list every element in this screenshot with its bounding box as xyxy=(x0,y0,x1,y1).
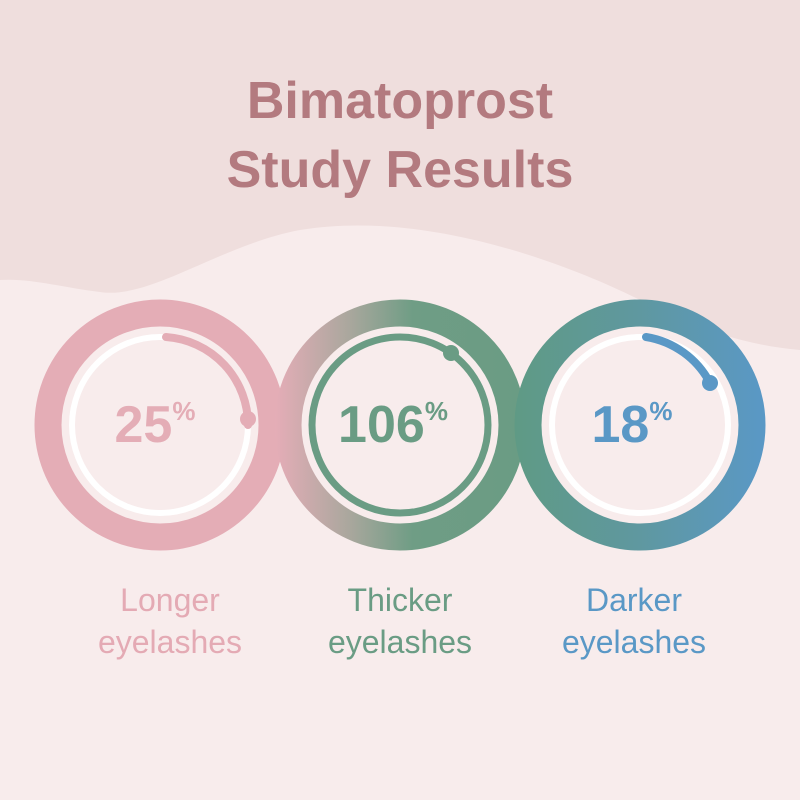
ring: right blue: % xyxy=(649,396,672,426)
label: darker xyxy=(562,582,706,660)
label: longer: Longer xyxy=(120,582,220,618)
ring: right blue: 18 xyxy=(592,396,649,454)
ring: middle green: % xyxy=(425,396,448,426)
label: thicker: Thicker xyxy=(348,582,453,618)
label: longer xyxy=(98,582,242,660)
background top wave xyxy=(0,0,800,350)
ring: middle green: 106 xyxy=(338,396,425,454)
ring: right blue xyxy=(528,313,752,537)
title: Bimatoprost xyxy=(247,72,553,130)
ring: left pink: 25 xyxy=(115,396,172,454)
title xyxy=(227,72,573,199)
label: thicker: eyelashes xyxy=(328,624,472,660)
label: darker: Darker xyxy=(586,582,682,618)
label: longer: eyelashes xyxy=(98,624,242,660)
ring: middle green xyxy=(288,313,512,537)
label: darker: eyelashes xyxy=(562,624,706,660)
ring: left pink: % xyxy=(172,396,195,426)
label: thicker xyxy=(328,582,472,660)
ring: left pink xyxy=(48,313,272,537)
title: Study Results xyxy=(227,141,573,199)
